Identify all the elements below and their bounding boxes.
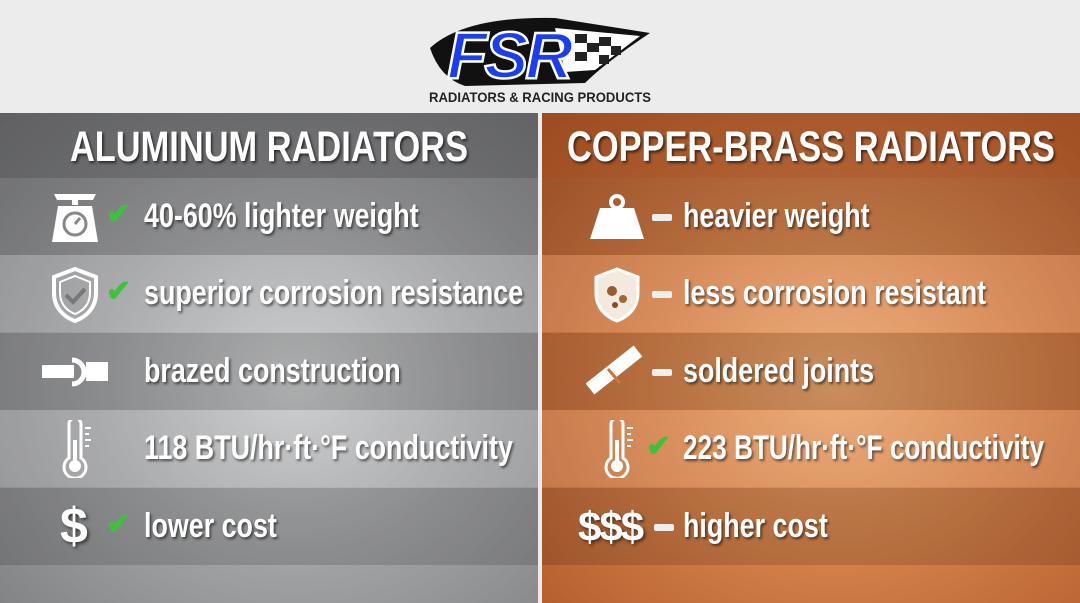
icon: scale <box>52 194 98 242</box>
icon: shield <box>52 267 98 323</box>
logo <box>429 18 651 105</box>
row: conductivity <box>542 410 1080 487</box>
row: corrosion: ✔ <box>106 275 131 308</box>
icon: weight <box>590 194 644 239</box>
row: weight: heavier weight <box>683 197 870 235</box>
row: weight: 40-60% lighter weight <box>144 197 419 235</box>
row: corrosion <box>0 255 538 332</box>
row: joints <box>542 333 1080 410</box>
row: construction <box>0 333 538 410</box>
row: weight <box>542 178 1080 255</box>
icon: soldered joint <box>586 346 642 394</box>
panel: aluminum <box>0 113 538 603</box>
row: conductivity: 118 BTU/hr·ft·°F conductivity <box>144 429 513 467</box>
row: joints: soldered joints <box>683 352 874 390</box>
panel: copper-brass <box>542 113 1080 603</box>
row: cost: lower cost <box>144 507 277 545</box>
row: cost: higher cost <box>683 507 828 545</box>
row: conductivity <box>0 410 538 487</box>
logo: FSR <box>447 18 573 92</box>
row: cost <box>542 488 1080 565</box>
heading: copper: COPPER-BRASS RADIATORS <box>567 123 1055 171</box>
icon: dollar: $ <box>60 498 88 554</box>
icon: dollars: $$$ <box>578 503 642 550</box>
icon: thermometer <box>604 420 633 478</box>
row: weight <box>0 178 538 255</box>
heading: copper <box>542 113 1080 178</box>
heading: aluminum: ALUMINUM RADIATORS <box>70 123 468 171</box>
row: corrosion: superior corrosion resistance <box>144 274 523 312</box>
row: construction: brazed construction <box>144 352 401 390</box>
row: weight: ✔ <box>106 198 131 231</box>
row: cost <box>0 488 538 565</box>
row: conductivity: ✔ <box>646 430 671 463</box>
heading: aluminum <box>0 113 538 178</box>
row: corrosion: less corrosion resistant <box>683 274 986 312</box>
row: corrosion <box>542 255 1080 332</box>
icon: joint <box>42 358 108 386</box>
icon: corroded shield <box>594 267 640 323</box>
icon: thermometer <box>62 420 91 478</box>
row: cost: ✔ <box>106 508 131 541</box>
row: conductivity: 223 BTU/hr·ft·°F conductivity <box>683 429 1044 467</box>
